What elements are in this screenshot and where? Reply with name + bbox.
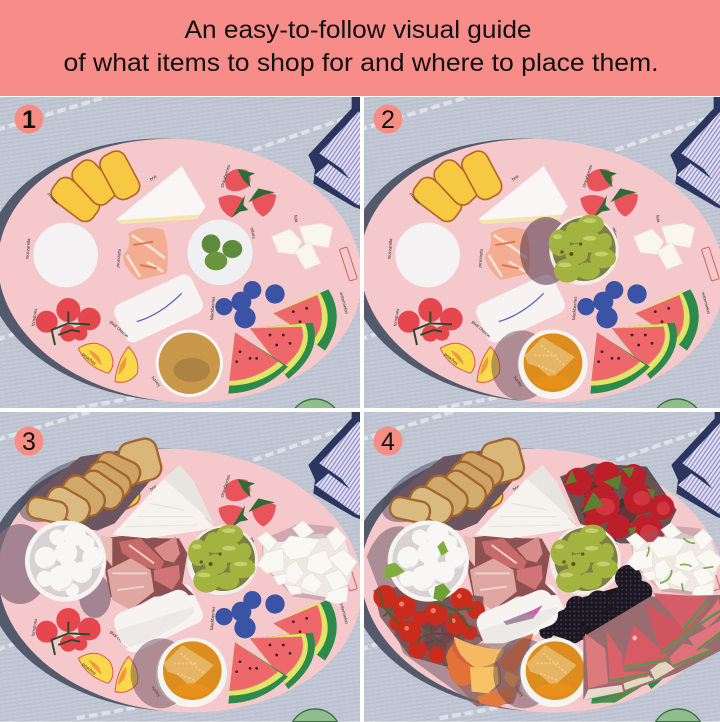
title banner xyxy=(0,0,720,96)
platter base xyxy=(364,412,720,722)
blackberries xyxy=(539,565,652,643)
badge 3: 3 xyxy=(22,428,36,456)
title text: An easy-to-follow visual guide xyxy=(184,16,532,44)
feta xyxy=(257,521,357,604)
platter shadows xyxy=(367,526,513,707)
prosciutto xyxy=(463,535,557,610)
brie xyxy=(475,465,577,538)
prosciutto xyxy=(101,535,194,610)
badge 4 xyxy=(374,426,402,456)
badge 2 xyxy=(374,104,402,134)
photographed food xyxy=(367,436,720,708)
olive bowl shadow xyxy=(520,217,562,285)
badge 1: 1 xyxy=(22,106,36,134)
plate shadows xyxy=(0,524,111,618)
panel 4: finished platter xyxy=(364,412,720,722)
goat cheese xyxy=(114,590,194,647)
honey bowl xyxy=(491,330,588,400)
panel 3: bread, cheeses, meats added xyxy=(0,395,373,722)
panel 2: olives and honey added xyxy=(364,97,720,408)
peaches xyxy=(446,633,533,707)
badge 2: 2 xyxy=(381,106,395,134)
basil leaves and mozzarella bowl xyxy=(384,520,469,602)
watermelon xyxy=(583,593,720,703)
photographed food xyxy=(9,436,357,708)
mozzarella bowl xyxy=(25,520,106,602)
strawberries xyxy=(560,462,677,548)
title banner: of what items to shop for and where to place them. xyxy=(64,49,658,77)
crostini xyxy=(382,437,526,531)
brie xyxy=(112,465,215,538)
platter with painted food illustrations xyxy=(0,395,373,722)
olive bowl xyxy=(188,525,258,595)
olive bowl xyxy=(549,215,619,285)
goat cheese with lavender xyxy=(476,590,558,647)
tomatoes xyxy=(373,585,485,667)
platter with painted food illustrations xyxy=(0,85,373,417)
panel 1: empty illustrated platter xyxy=(0,85,373,417)
platter with painted food illustrations xyxy=(364,97,720,408)
feta xyxy=(626,523,720,598)
honey bowl xyxy=(131,638,227,708)
crostini xyxy=(20,437,162,531)
badge 3 xyxy=(14,426,44,456)
herbs on feta xyxy=(647,538,713,592)
olive bowl xyxy=(551,525,621,595)
badge 1 xyxy=(14,104,44,134)
honey bowl xyxy=(493,638,590,708)
badge 4: 4 xyxy=(381,428,395,456)
